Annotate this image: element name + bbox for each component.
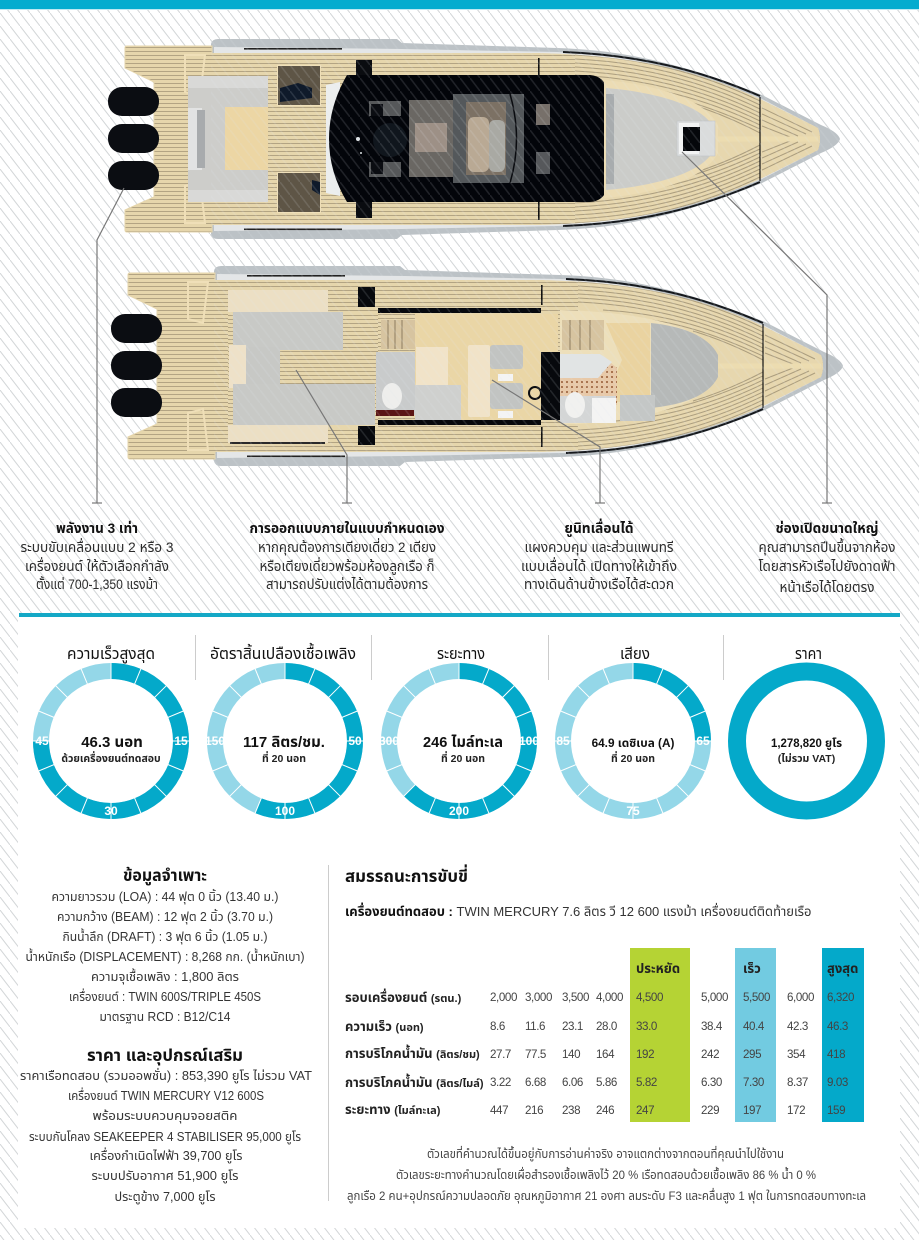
gauge: range: ระยะทาง xyxy=(437,646,485,663)
panel: driving performance xyxy=(345,864,866,1203)
table: performance data: 7.30 xyxy=(743,1076,764,1089)
table: performance data: 77.5 xyxy=(525,1048,546,1061)
callout: large opening: หน้าเรือได้โดยตรง xyxy=(780,580,874,595)
panel: specifications: เครื่องกำเนิดไฟฟ้า 39,700 ยูโร xyxy=(90,1147,242,1163)
table: performance data: 354 xyxy=(787,1048,806,1061)
table: performance data: 238 xyxy=(562,1104,580,1117)
callout: custom interior xyxy=(250,520,445,592)
heading: price and options: ราคา และอุปกรณ์เสริม xyxy=(87,1046,243,1066)
panel: specifications: เครื่องยนต์ : TWIN 600S/TRIPLE 450S xyxy=(69,988,261,1004)
section divider bar xyxy=(19,613,900,617)
callout: large opening: ช่องเปิดขนาดใหญ่ xyxy=(776,520,878,536)
aft cabin beds xyxy=(228,290,378,444)
table: performance data: 140 xyxy=(562,1048,580,1061)
gauge: range: ที่ 20 นอท xyxy=(441,751,485,765)
arrow: sliding unit callout leader xyxy=(492,380,605,503)
table: performance data: 192 xyxy=(636,1048,654,1061)
gauge: noise xyxy=(553,646,713,821)
callout: large opening xyxy=(758,520,896,595)
table: performance data: 6.30 xyxy=(701,1076,722,1089)
icon: three outboard engines, interior view xyxy=(111,314,162,417)
gauge: fuel consumption: 100 xyxy=(275,804,295,818)
gauge: top speed: ความเร็วสูงสุด xyxy=(67,645,155,663)
panel: specifications: ระบบปรับอากาศ 51,900 ยูโร xyxy=(92,1169,238,1183)
table: performance data: รอบเครื่องยนต์ (รตน.) xyxy=(345,988,462,1005)
aft lounge seat xyxy=(188,76,268,202)
table: performance data: 4,500 xyxy=(636,991,663,1004)
panel: performance gauges xyxy=(31,635,876,821)
table: performance data: 247 xyxy=(636,1104,654,1117)
table highlight: max xyxy=(822,948,864,1122)
table: performance data: 5.82 xyxy=(636,1076,657,1089)
callout: sliding unit: ทางเดินด้านข้างเรือได้สะดวก xyxy=(524,577,674,592)
table: performance data: เร็ว xyxy=(743,961,761,976)
gauge: top speed: ด้วยเครื่องยนต์ทดสอบ xyxy=(61,751,161,765)
gauge: noise: เสียง xyxy=(620,646,650,663)
gauge: fuel consumption xyxy=(205,642,365,821)
table: performance data xyxy=(345,961,858,1117)
gauge: fuel consumption: ที่ 20 นอท xyxy=(262,751,306,765)
deck hatches xyxy=(277,65,321,213)
panel: specifications: เครื่องยนต์ TWIN MERCURY V12 600S xyxy=(68,1087,264,1103)
footnote: ตัวเลขระยะทางคำนวณโดยเผื่อสำรองเชื้อเพลิงไว้ 20 % เรือทดสอบด้วยเชื้อเพลิง 86 % น้ำ 0 % xyxy=(396,1166,816,1182)
footnote: ตัวเลขที่คำนวณได้ขึ้นอยู่กับการอ่านค่าจริง อาจแตกต่างจากตอนที่คุณนำไปใช้งาน xyxy=(427,1145,784,1161)
table: performance data: 242 xyxy=(701,1048,719,1061)
arrow: large hatch callout leader xyxy=(682,152,832,503)
table: performance data: 246 xyxy=(596,1104,614,1117)
table: performance data: 46.3 xyxy=(827,1020,848,1033)
side pillars xyxy=(356,60,372,218)
sliding helm unit xyxy=(468,345,560,420)
table: performance data: 159 xyxy=(827,1104,845,1117)
table highlight: fast xyxy=(735,948,776,1122)
white lower panel xyxy=(18,617,900,1228)
gauge: price: (ไม่รวม VAT) xyxy=(778,752,835,765)
gauge: range: 100 xyxy=(519,734,539,748)
panel: specifications: น้ำหนักเรือ (DISPLACEMENT) : 8,268 กก. (น้ำหนักเบา) xyxy=(26,948,304,964)
gauge: noise: 65 xyxy=(696,734,710,748)
table: performance data: 11.6 xyxy=(525,1020,545,1033)
heading: specifications: ข้อมูลจำเพาะ xyxy=(123,866,207,886)
gauge: range: 246 ไมล์ทะเล xyxy=(423,734,503,751)
footnote: ลูกเรือ 2 คน+อุปกรณ์ความปลอดภัย อุณหภูมิอากาศ 21 องศา ลมระดับ F3 และคลื่นสูง 1 ฟุต ในการทดสอบทางทะเล xyxy=(347,1187,866,1203)
gauge: noise: ที่ 20 นอท xyxy=(611,751,655,765)
panel: specifications: พร้อมระบบควบคุมจอยสติค xyxy=(92,1109,238,1123)
gauge: range xyxy=(379,646,539,821)
table: performance data: 27.7 xyxy=(490,1048,511,1061)
panel: specifications: ประตูข้าง 7,000 ยูโร xyxy=(114,1190,216,1204)
forward cabin, head and bed xyxy=(560,310,718,424)
callout: sliding unit: แบบเลื่อนได้ เปิดทางให้เข้าถึง xyxy=(521,557,677,574)
table: performance data: สูงสุด xyxy=(827,961,858,977)
table: performance data: 42.3 xyxy=(787,1020,808,1033)
callout: custom interior: สามารถปรับแต่งได้ตามต้องการ xyxy=(266,576,428,592)
black hatches xyxy=(358,287,541,445)
callout: triple power xyxy=(20,520,174,592)
table: performance data: การบริโภคน้ำมัน (ลิตร/ชม) xyxy=(345,1044,480,1061)
top colour bar xyxy=(0,0,919,10)
main cabin floor and stairs xyxy=(376,314,558,420)
table: performance data: 8.37 xyxy=(787,1076,808,1089)
vertical panel divider xyxy=(328,865,329,1201)
callout: triple power: พลังงาน 3 เท่า xyxy=(56,520,138,536)
table: performance data: การบริโภคน้ำมัน (ลิตร/ไมล์) xyxy=(345,1073,484,1090)
panel: specifications: กินน้ำลึก (DRAFT) : 3 ฟุต 6 นิ้ว (1.05 ม.) xyxy=(62,928,268,944)
table highlight: economy xyxy=(630,948,690,1122)
gauge: top speed xyxy=(31,645,191,821)
callout: custom interior: การออกแบบภายในแบบกำหนดเอง xyxy=(250,520,445,536)
icon: three outboard engines xyxy=(108,87,159,190)
table: performance data: ระยะทาง (ไมล์ทะเล) xyxy=(345,1102,441,1117)
panel: specifications: มาตรฐาน RCD : B12/C14 xyxy=(100,1010,231,1024)
table: performance data: 3.22 xyxy=(490,1076,511,1089)
table: performance data: 172 xyxy=(787,1104,805,1117)
arrow: engines callout leader xyxy=(92,188,124,503)
table: performance data: 3,500 xyxy=(562,991,589,1004)
table: performance data: ประหยัด xyxy=(636,961,680,976)
table: performance data: 5,000 xyxy=(701,991,728,1004)
gauge: noise: 64.9 เดซิเบล (A) xyxy=(592,736,675,750)
table: performance data: 23.1 xyxy=(562,1020,583,1033)
foredeck lounge with hatch xyxy=(604,80,718,198)
gauge: fuel consumption: 50 xyxy=(348,734,362,748)
gauge: fuel consumption: 117 ลิตร/ชม. xyxy=(243,734,325,751)
boat top view: deck xyxy=(108,39,840,239)
table: performance data: 3,000 xyxy=(525,991,552,1004)
callout: sliding unit xyxy=(521,518,677,592)
gauge: noise: 75 xyxy=(626,804,640,818)
panel: specifications: ระบบกันโคลง SEAKEEPER 4 STABILISER 95,000 ยูโร xyxy=(29,1130,301,1144)
table: performance data: 33.0 xyxy=(636,1020,657,1033)
heading: performance: สมรรถนะการขับขี่ xyxy=(345,864,468,886)
table: performance data: ความเร็ว (นอท) xyxy=(345,1019,424,1034)
panel: specifications: ราคาเรือทดสอบ (รวมออพชั่น) : 853,390 ยูโร ไม่รวม VAT xyxy=(20,1068,312,1083)
gauge: fuel consumption: อัตราสิ้นเปลืองเชื้อเพลิง xyxy=(210,642,356,663)
table: performance data: 9.03 xyxy=(827,1076,848,1089)
table: performance data: 197 xyxy=(743,1104,761,1117)
gauge: price xyxy=(737,646,876,810)
table: performance data: 28.0 xyxy=(596,1020,617,1033)
panel: specifications: ความกว้าง (BEAM) : 12 ฟุต 2 นิ้ว (3.70 ม.) xyxy=(57,909,273,924)
black hardtop xyxy=(329,75,610,202)
table: performance data: 40.4 xyxy=(743,1020,765,1033)
gauge: range: 300 xyxy=(379,734,399,748)
test engine line: เครื่องยนต์ทดสอบ : TWIN MERCURY 7.6 ลิตร วี 12 600 แรงม้า เครื่องยนต์ติดท้ายเรือ xyxy=(345,902,812,919)
callout: triple power: เครื่องยนต์ ให้ตัวเลือกกำลัง xyxy=(25,557,169,574)
table: performance data: 2,000 xyxy=(490,991,517,1004)
table: performance data: 8.6 xyxy=(490,1020,505,1033)
panel: specifications xyxy=(20,866,312,1204)
table: performance data: 38.4 xyxy=(701,1020,723,1033)
table: performance data: 6,320 xyxy=(827,991,854,1004)
gauge: range: 200 xyxy=(449,804,469,818)
callout: sliding unit: แผงควบคุม และส่วนแพนทรี xyxy=(524,539,674,556)
callout: custom interior: หากคุณต้องการเตียงเดี่ยว 2 เตียง xyxy=(258,538,436,556)
gauge: price: 1,278,820 ยูโร xyxy=(771,736,842,750)
panel: specifications: ความจุเชื้อเพลิง : 1,800 ลิตร xyxy=(91,968,239,984)
panel: specifications: ความยาวรวม (LOA) : 44 ฟุต 0 นิ้ว (13.40 ม.) xyxy=(52,889,278,904)
callout: large opening: คุณสามารถปีนขึ้นจากห้อง xyxy=(758,538,896,556)
table: performance data: 6.68 xyxy=(525,1076,546,1089)
gauge: price: ราคา xyxy=(795,646,822,663)
callout: sliding unit: ยูนิทเลื่อนได้ xyxy=(564,518,634,538)
white coaming xyxy=(326,82,340,196)
table: performance data: 447 xyxy=(490,1104,508,1117)
table: performance data: 6.06 xyxy=(562,1076,583,1089)
gauge: top speed: 30 xyxy=(104,804,118,818)
footnote xyxy=(347,1145,866,1203)
table: performance data: 216 xyxy=(525,1104,543,1117)
table: performance data: 418 xyxy=(827,1048,845,1061)
gauge: top speed: 15 xyxy=(174,734,188,748)
table: performance data: 164 xyxy=(596,1048,615,1061)
callout: triple power: ตั้งแต่ 700-1,350 แรงม้า xyxy=(36,576,158,592)
table: performance data: 229 xyxy=(701,1104,719,1117)
boat lower view: interior layout xyxy=(111,266,843,466)
table: performance data: 5.86 xyxy=(596,1076,617,1089)
gauge: fuel consumption: 150 xyxy=(205,734,225,748)
table: performance data: 5,500 xyxy=(743,991,770,1004)
gauge: top speed: 46.3 นอท xyxy=(81,734,143,751)
table: performance data: 4,000 xyxy=(596,991,623,1004)
gauge: top speed: 45 xyxy=(35,734,49,748)
gauge: noise: 85 xyxy=(556,734,570,748)
callout: custom interior: หรือเตียงเดี่ยวพร้อมห้องลูกเรือ ก็ xyxy=(260,557,434,575)
callout: triple power: ระบบขับเคลื่อนแบบ 2 หรือ 3 xyxy=(20,538,174,555)
callout: large opening: โดยสารหัวเรือไปยังดาดฟ้า xyxy=(758,559,896,574)
table: performance data: 295 xyxy=(743,1048,761,1061)
table: performance data: 6,000 xyxy=(787,991,814,1004)
arrow: custom interior callout leader xyxy=(296,370,352,503)
